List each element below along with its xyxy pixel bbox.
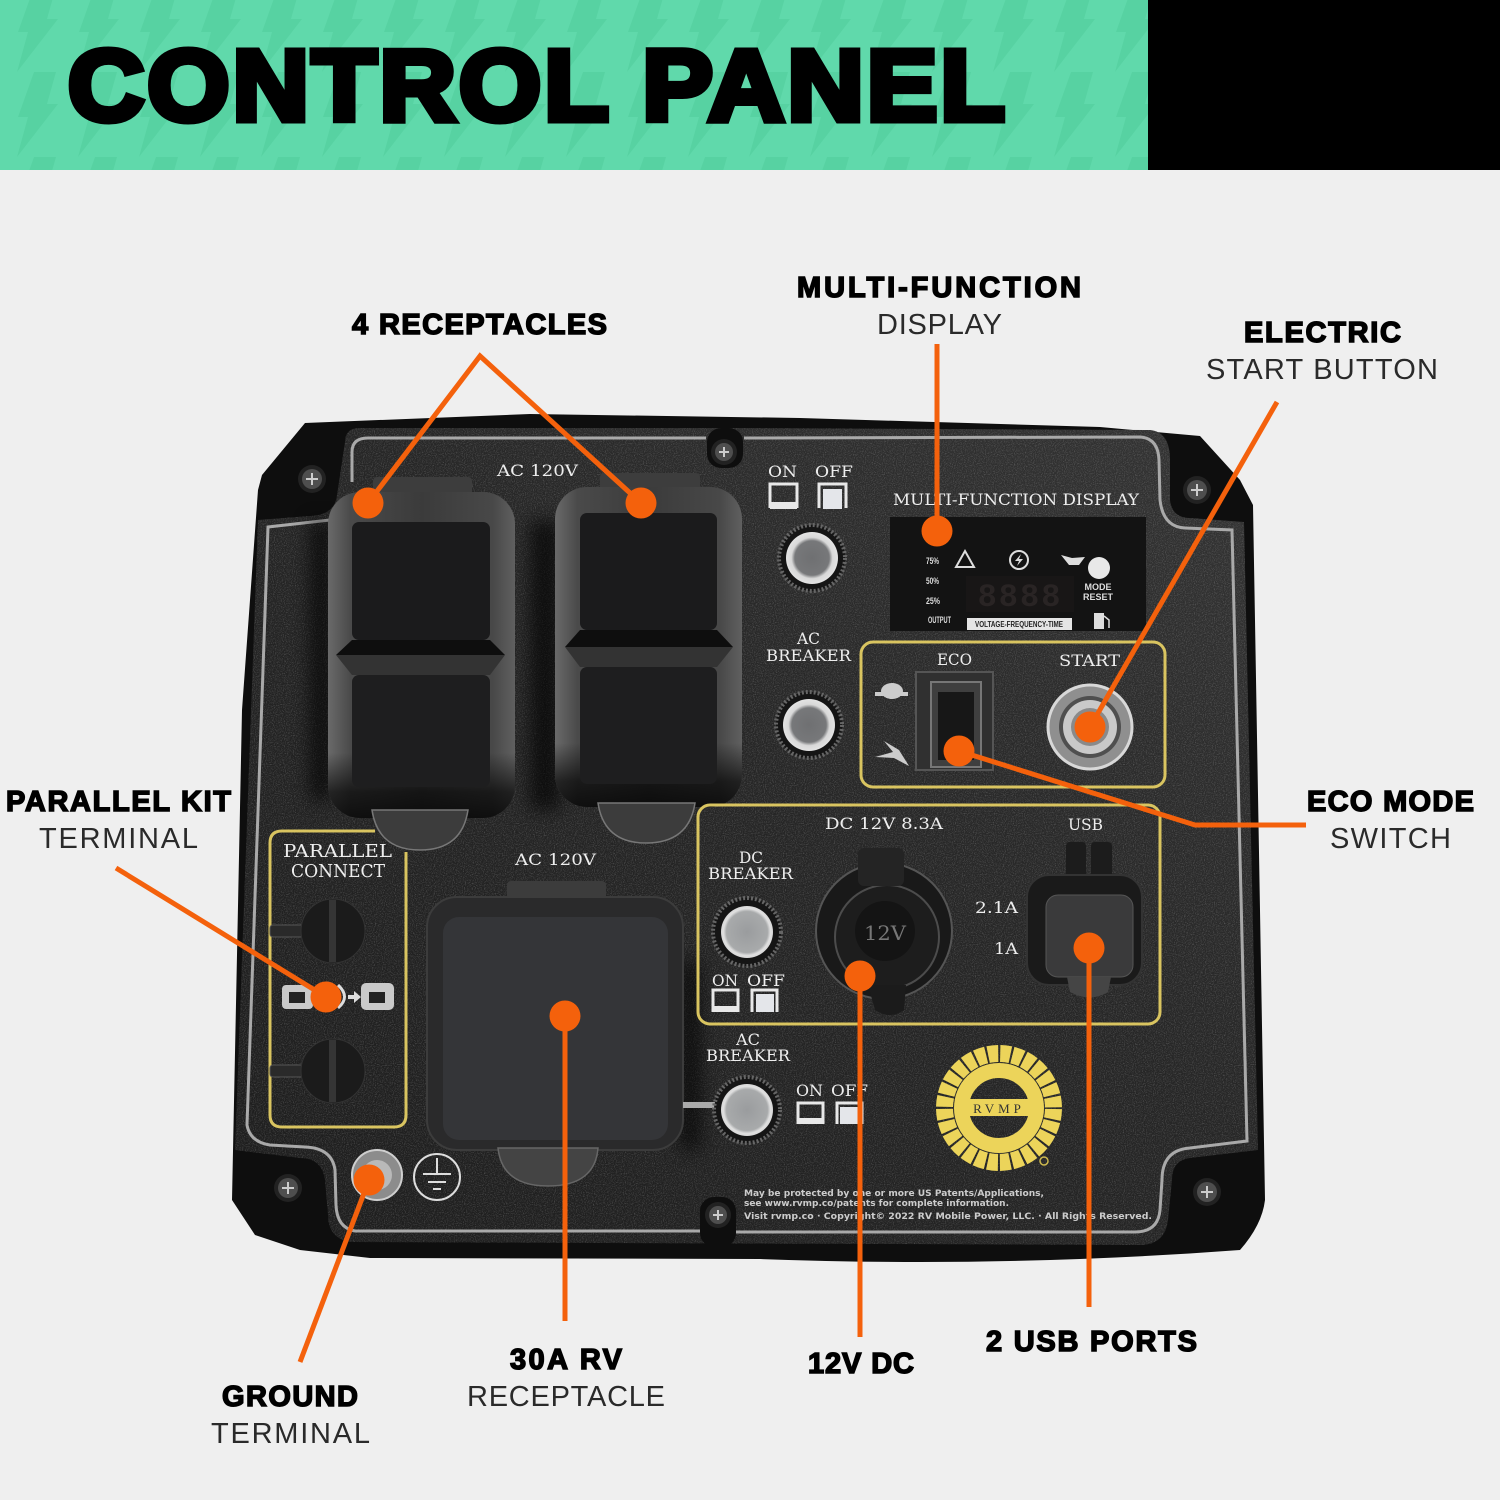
label: multi-function display [797, 272, 1081, 341]
panel printed labels: AC 120V [496, 461, 578, 480]
RV leader [550, 1000, 580, 1321]
label: 30A RV receptacle [467, 1344, 665, 1413]
RVMP logo: RVMP [973, 1101, 1025, 1116]
eco leader [944, 736, 1306, 825]
generator control panel [230, 414, 1265, 1262]
label: eco mode switch: SWITCH [1330, 823, 1451, 855]
rabbit icon [875, 741, 909, 766]
legal text: Visit rvmp.co · Copyright© 2022 RV Mobile Power, LLC. · All Rights Reserved. [744, 1212, 1152, 1222]
multi-function display: RESET [1083, 592, 1114, 602]
panel printed labels: ECO [937, 650, 972, 669]
green band with lightning pattern [0, 0, 1148, 170]
faceplate silver outline [247, 437, 1247, 1232]
soft shadows beside covers [310, 520, 700, 1150]
panel printed labels: CONNECT [291, 861, 385, 882]
label: parallel kit terminal: PARALLEL KIT [6, 786, 231, 818]
multi-function display: MODE [1084, 582, 1112, 592]
USB port cover [1027, 842, 1142, 998]
12V socket [816, 848, 952, 1015]
label: eco mode switch: ECO MODE [1307, 786, 1474, 818]
receptacles leader [352, 356, 656, 518]
label: ground terminal: GROUND [222, 1381, 358, 1413]
label: electric start button [1206, 317, 1438, 386]
RVMP logo [944, 1054, 1054, 1165]
panel printed labels: AC [796, 629, 820, 648]
label: ground terminal: TERMINAL [211, 1418, 370, 1450]
multi-function display [890, 517, 1146, 631]
header banner [0, 0, 1500, 170]
RV receptacle cover [427, 881, 683, 1186]
cover pull tab [372, 810, 468, 850]
panel printed labels: OFF [831, 1081, 868, 1100]
12V leader [844, 960, 876, 1337]
callout lines and dots [116, 344, 1306, 1362]
USB leader [1074, 932, 1104, 1307]
display leader [922, 344, 952, 546]
LED digits: 8888 [978, 579, 1062, 616]
ground terminal [352, 1150, 460, 1200]
bolt icon [1010, 551, 1028, 569]
panel printed labels: ON [768, 462, 797, 481]
panel printed labels: ON [712, 971, 738, 990]
voltage label [967, 618, 1072, 630]
panel printed labels: START [1059, 651, 1120, 670]
panel printed labels: PARALLEL [283, 841, 392, 862]
label: 4 receptacles: 4 RECEPTACLES [352, 309, 607, 341]
mode button [1088, 557, 1110, 579]
turtle icon [875, 683, 908, 699]
fuel icon [1094, 613, 1109, 629]
voltage label: VOLTAGE-FREQUENCY-TIME [975, 620, 1064, 629]
parallel leader [116, 868, 342, 1012]
panel printed labels: BREAKER [766, 646, 852, 665]
label: electric start button: START BUTTON [1206, 354, 1438, 386]
panel printed labels [283, 461, 1139, 1100]
label: ground terminal [211, 1381, 370, 1450]
parallel connect terminals [270, 899, 394, 1103]
legal text: see www.rvmp.co/patents for complete information. [744, 1199, 1009, 1209]
multi-function display: 50% [926, 576, 939, 586]
screws [274, 439, 1221, 1228]
label: eco mode switch [1307, 786, 1474, 855]
cover pull tab [498, 1148, 598, 1186]
multi-function display: 75% [926, 556, 939, 566]
label: multi-function display: DISPLAY [877, 309, 1002, 341]
12V socket: 12V [864, 921, 907, 945]
screw recess notches [700, 428, 743, 1247]
panel printed labels: OFF [815, 462, 853, 481]
panel printed labels: DC [739, 848, 763, 867]
eco switch [875, 672, 993, 770]
title: CONTROL PANEL [68, 30, 1008, 142]
yellow outlined groups [270, 642, 1165, 1127]
cover pull tab [598, 803, 695, 843]
receptacle cover left [328, 477, 515, 850]
panel printed labels: DC 12V 8.3A [825, 814, 944, 833]
oil can icon [1061, 555, 1085, 565]
warning triangle icon [956, 551, 974, 567]
multi-function display: 25% [926, 596, 940, 606]
multi-function display: OUTPUT [928, 615, 951, 625]
start button [1048, 685, 1132, 769]
outer black housing [232, 414, 1265, 1262]
panel printed labels: AC 120V [514, 850, 596, 869]
black header block [1148, 0, 1500, 170]
label: 30A RV receptacle: RECEPTACLE [467, 1381, 665, 1413]
label: 30A RV receptacle: 30A RV [510, 1344, 623, 1376]
panel printed labels: AC [735, 1030, 760, 1049]
panel printed labels: 1A [994, 939, 1018, 958]
label: parallel kit terminal: TERMINAL [39, 823, 198, 855]
panel printed labels: MULTI-FUNCTION DISPLAY [893, 490, 1139, 509]
panel printed labels: 2.1A [975, 898, 1019, 917]
panel printed labels: USB [1068, 815, 1103, 834]
receptacle cover right [555, 473, 742, 843]
panel printed labels: OFF [747, 971, 785, 990]
panel printed labels: ON [796, 1081, 823, 1100]
legal text [744, 1189, 1152, 1222]
ground leader [300, 1164, 384, 1362]
label: parallel kit terminal [6, 786, 231, 855]
label: electric start button: ELECTRIC [1244, 317, 1401, 349]
breaker buttons [683, 525, 845, 1143]
on/off indicator squares [713, 484, 862, 1124]
label: 12V DC: 12V DC [808, 1348, 914, 1380]
start leader [1074, 402, 1277, 742]
panel printed labels: BREAKER [706, 1046, 791, 1065]
panel printed labels: BREAKER [708, 864, 794, 883]
label: 2 USB ports: 2 USB PORTS [986, 1326, 1197, 1358]
label: multi-function display: MULTI-FUNCTION [797, 272, 1081, 304]
textured faceplate [230, 425, 1265, 1255]
legal text: May be protected by one or more US Patents/Applications, [744, 1189, 1044, 1199]
